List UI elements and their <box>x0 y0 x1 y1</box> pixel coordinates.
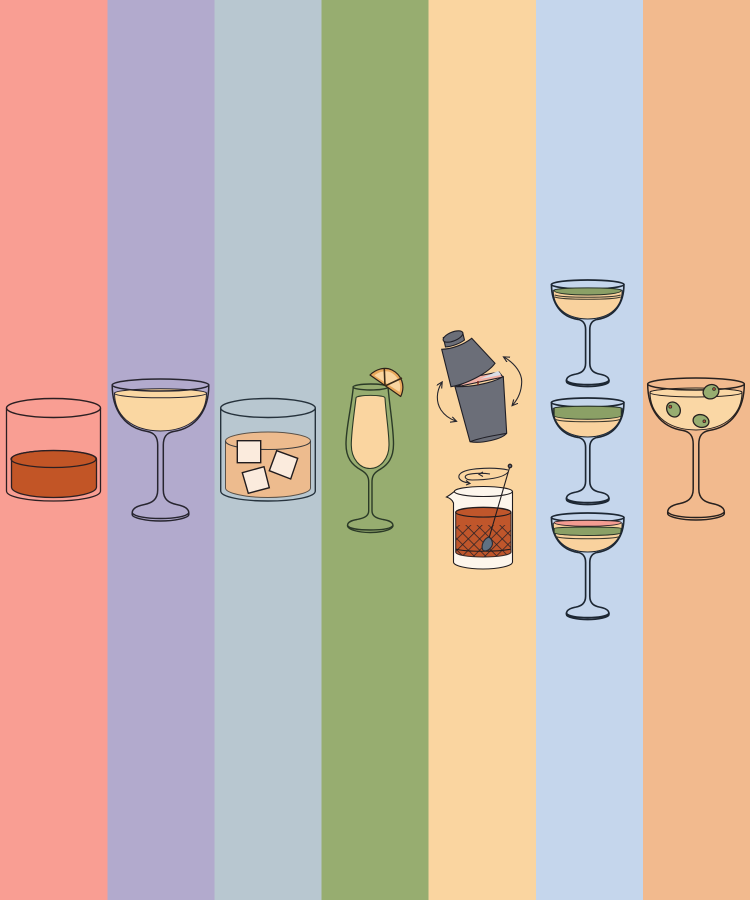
icon: champagne flute with citrus wedge <box>346 368 403 532</box>
citrus wedge <box>370 368 403 396</box>
ice cube 3 <box>242 467 269 493</box>
olive 3 <box>701 382 721 401</box>
icon: coupe with olives <box>648 378 744 520</box>
rotation arrows <box>437 357 522 421</box>
ice lattice <box>456 525 511 557</box>
icon: mixing glass with bar spoon <box>446 464 512 569</box>
icon: rocks glass with ice cubes <box>221 398 315 501</box>
icon: cocktail shaker with motion arrows <box>437 328 522 442</box>
shaker cap <box>442 338 495 387</box>
bar spoon <box>487 466 510 545</box>
shaker contents <box>456 372 503 387</box>
pink layer <box>554 520 621 526</box>
icon: rocks glass with dark amber drink <box>6 398 100 501</box>
stir arrows <box>459 468 508 485</box>
olive 1 <box>664 399 683 420</box>
liquid <box>456 507 511 557</box>
green layer <box>554 288 621 295</box>
icon: coupe with pink and green layers <box>551 513 624 620</box>
icon: coupe glass with pale drink <box>112 379 209 521</box>
ice cube 1 <box>237 441 261 463</box>
glass body <box>446 487 512 569</box>
shaker cup <box>455 377 507 442</box>
green layer <box>554 406 621 419</box>
green layer <box>554 527 621 536</box>
icon: coupe with thick green layer <box>551 398 624 504</box>
olive 2 <box>692 413 710 429</box>
ice cube 2 <box>269 451 298 479</box>
icon: coupe with green layer <box>551 280 624 386</box>
